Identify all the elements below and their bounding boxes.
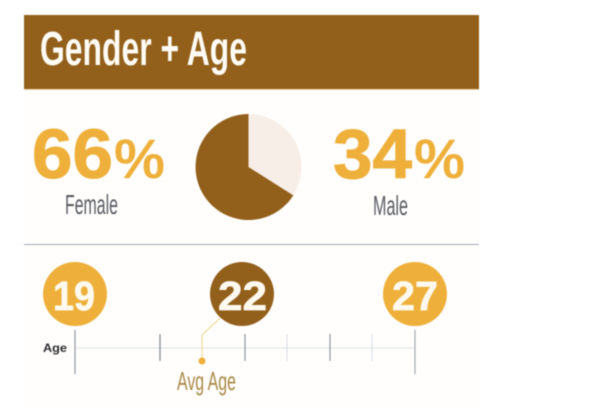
- male percentage: 34: [333, 115, 412, 193]
- minimum age marker: [43, 262, 107, 326]
- maximum age marker: 27: [392, 273, 438, 319]
- female percentage: 66: [32, 115, 113, 193]
- average age marker: [210, 262, 274, 326]
- title: Gender + Age: [40, 23, 247, 76]
- minimum age marker: 19: [53, 273, 95, 319]
- female statistic: [32, 115, 165, 220]
- female percentage: [32, 115, 165, 193]
- pie chart: [196, 114, 302, 220]
- average age callout: [177, 318, 236, 396]
- axis label: Age: [43, 343, 67, 355]
- average age marker: 22: [218, 273, 267, 319]
- male label: Male: [373, 190, 408, 221]
- average age label: Avg Age: [177, 366, 236, 396]
- male percentage: %: [414, 127, 465, 190]
- male percentage: [333, 115, 465, 193]
- maximum age marker: [383, 262, 447, 326]
- female percentage: %: [114, 127, 165, 190]
- male statistic: [333, 115, 465, 221]
- female label: Female: [65, 189, 118, 220]
- header banner: [24, 15, 479, 90]
